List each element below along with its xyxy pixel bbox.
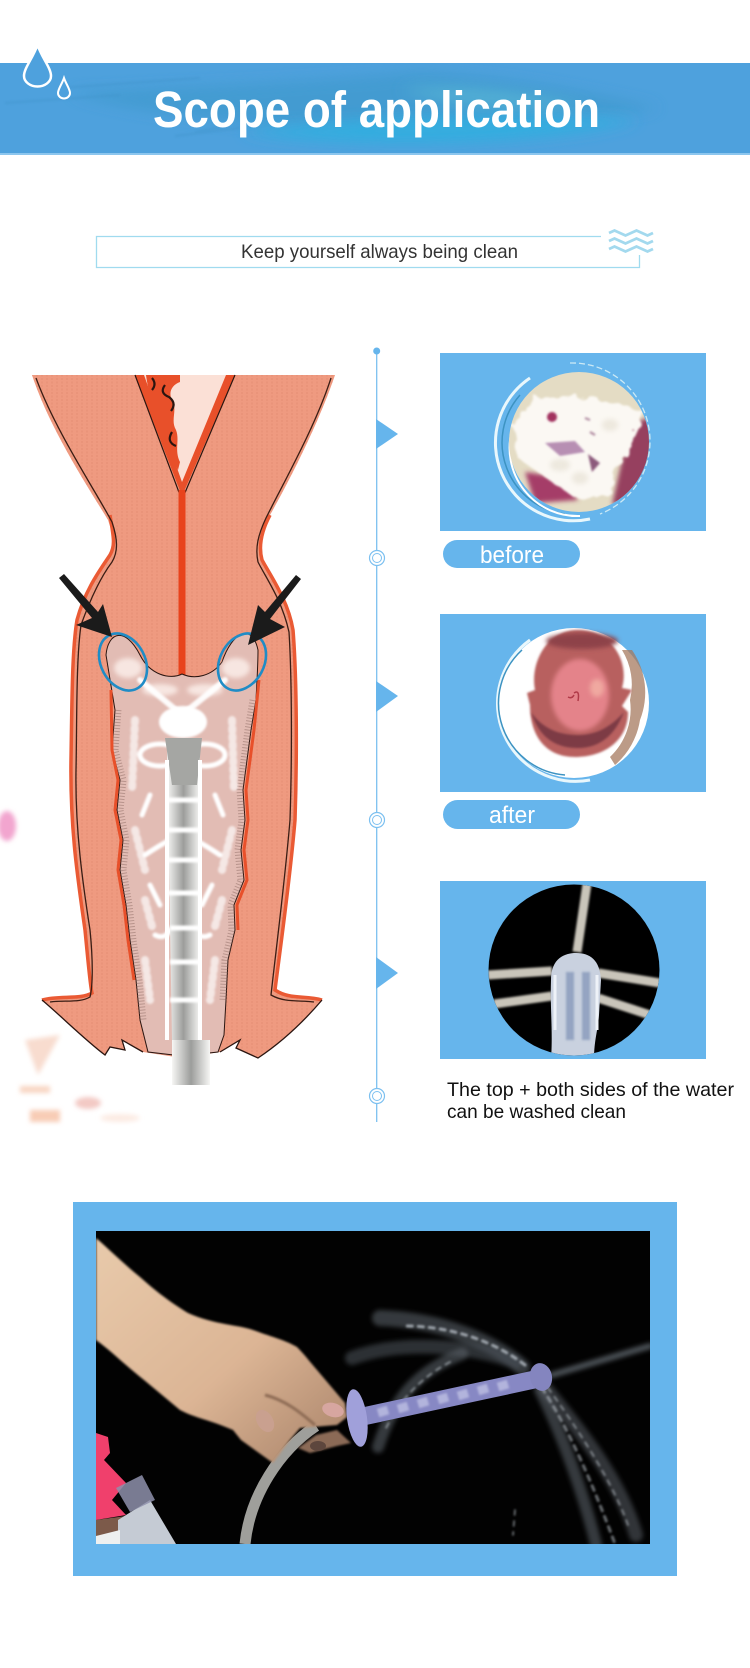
before pill: before xyxy=(480,542,544,569)
caption xyxy=(447,1079,734,1123)
panel: nozzle close-up xyxy=(440,881,706,1060)
subtitle box xyxy=(96,236,640,268)
before pill xyxy=(443,540,580,569)
endoscopic view: after xyxy=(527,630,632,757)
outer wall lines xyxy=(36,378,331,1058)
uterine body xyxy=(32,375,335,1058)
icon: waves xyxy=(609,230,653,252)
vaginal cavity xyxy=(106,633,258,1056)
endoscopic view: before xyxy=(509,372,649,512)
panel: before photo xyxy=(440,353,706,531)
after pill: after xyxy=(489,802,535,829)
timeline xyxy=(370,348,398,1122)
marker 3 xyxy=(370,957,398,1104)
panel: after photo xyxy=(440,614,706,792)
spray bottle xyxy=(96,1433,176,1544)
caption: can be washed clean xyxy=(447,1101,626,1123)
water jets xyxy=(488,884,660,1015)
hatched mucosa edge xyxy=(115,700,253,1020)
caption: The top + both sides of the water xyxy=(447,1079,734,1101)
background smudges xyxy=(0,811,140,1122)
marker 1 xyxy=(370,419,398,566)
water ring xyxy=(495,363,650,521)
after pill xyxy=(443,800,580,829)
water spray xyxy=(352,1318,650,1544)
subtitle text: Keep yourself always being clean xyxy=(241,241,518,263)
marker 2 xyxy=(370,681,398,828)
arm and hand xyxy=(96,1238,351,1463)
cervical canal xyxy=(135,375,235,676)
hose xyxy=(245,1426,316,1544)
nozzle head xyxy=(551,953,601,1060)
arrow: right xyxy=(248,575,301,645)
panel: product photo xyxy=(73,1202,677,1576)
white disc and water ring xyxy=(497,628,649,781)
douche nozzle in diagram xyxy=(159,706,210,1085)
icon: water drops xyxy=(24,45,70,99)
title: Scope of application xyxy=(153,81,600,138)
fornix highlights xyxy=(114,658,250,696)
arrow: left xyxy=(59,574,112,637)
nozzle rod xyxy=(343,1361,555,1448)
anatomical diagram xyxy=(0,375,335,1122)
blue ellipses marking fornices xyxy=(89,625,276,699)
header banner xyxy=(0,63,750,155)
red inner wall xyxy=(111,680,259,980)
white water splashes xyxy=(132,680,234,1000)
